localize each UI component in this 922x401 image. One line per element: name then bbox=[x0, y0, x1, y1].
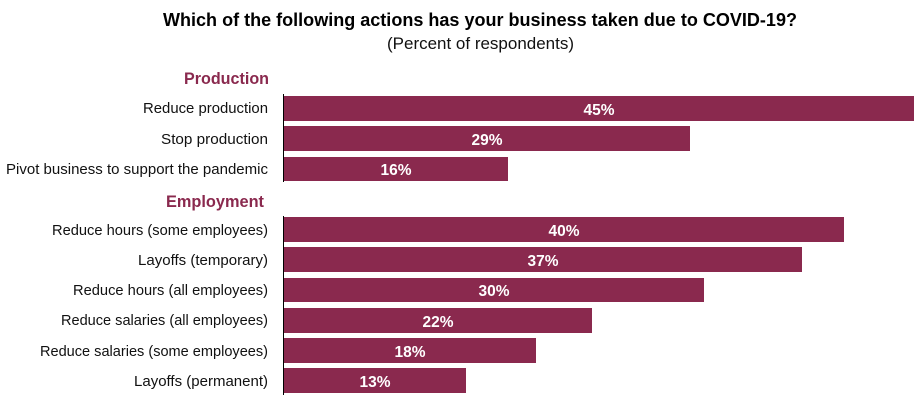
axis bbox=[283, 94, 284, 182]
axis bbox=[283, 216, 284, 395]
bar: stop production: Stop production bbox=[161, 132, 268, 148]
bar: reduce hours some: 40% bbox=[548, 223, 580, 240]
bar: layoffs permanent: 13% bbox=[360, 374, 390, 391]
chart: production bbox=[6, 94, 914, 182]
heading: production: Production bbox=[184, 69, 269, 88]
bar: reduce hours all: 30% bbox=[478, 283, 510, 300]
bar: reduce salaries all: Reduce salaries (all employees) bbox=[61, 313, 268, 329]
bar: reduce salaries all bbox=[61, 308, 592, 333]
bar: pivot business bbox=[6, 157, 508, 181]
bar: reduce production: Reduce production bbox=[143, 101, 268, 117]
bar: reduce hours some bbox=[52, 217, 844, 242]
bar: reduce production: 45% bbox=[584, 102, 614, 119]
bar: reduce production bbox=[143, 96, 914, 121]
bar: pivot business: Pivot business to support the pandemic bbox=[6, 162, 268, 178]
bar: pivot business: 16% bbox=[380, 162, 412, 179]
bar: reduce hours all: Reduce hours (all employees) bbox=[73, 283, 268, 299]
bar: layoffs temporary bbox=[138, 247, 802, 272]
chart: employment bbox=[40, 216, 844, 395]
bar: stop production: 29% bbox=[472, 132, 502, 149]
title: Which of the following actions has your business taken due to COVID-19? bbox=[163, 9, 797, 30]
bar: reduce salaries some: Reduce salaries (some employees) bbox=[40, 344, 268, 360]
bar: layoffs permanent: Layoffs (permanent) bbox=[134, 374, 268, 390]
heading: employment: Employment bbox=[166, 192, 264, 211]
bar: stop production bbox=[161, 126, 690, 151]
bar: layoffs permanent bbox=[134, 368, 466, 393]
bar: layoffs temporary: 37% bbox=[528, 253, 558, 270]
bar: reduce salaries some: 18% bbox=[394, 344, 426, 361]
bar: reduce hours some: Reduce hours (some employees) bbox=[52, 223, 268, 239]
bar: reduce salaries some bbox=[40, 338, 536, 363]
bar: reduce salaries all: 22% bbox=[422, 314, 454, 331]
subtitle: (Percent of respondents) bbox=[387, 35, 574, 53]
bar: reduce hours all bbox=[73, 278, 704, 302]
bar: layoffs temporary: Layoffs (temporary) bbox=[138, 253, 268, 269]
